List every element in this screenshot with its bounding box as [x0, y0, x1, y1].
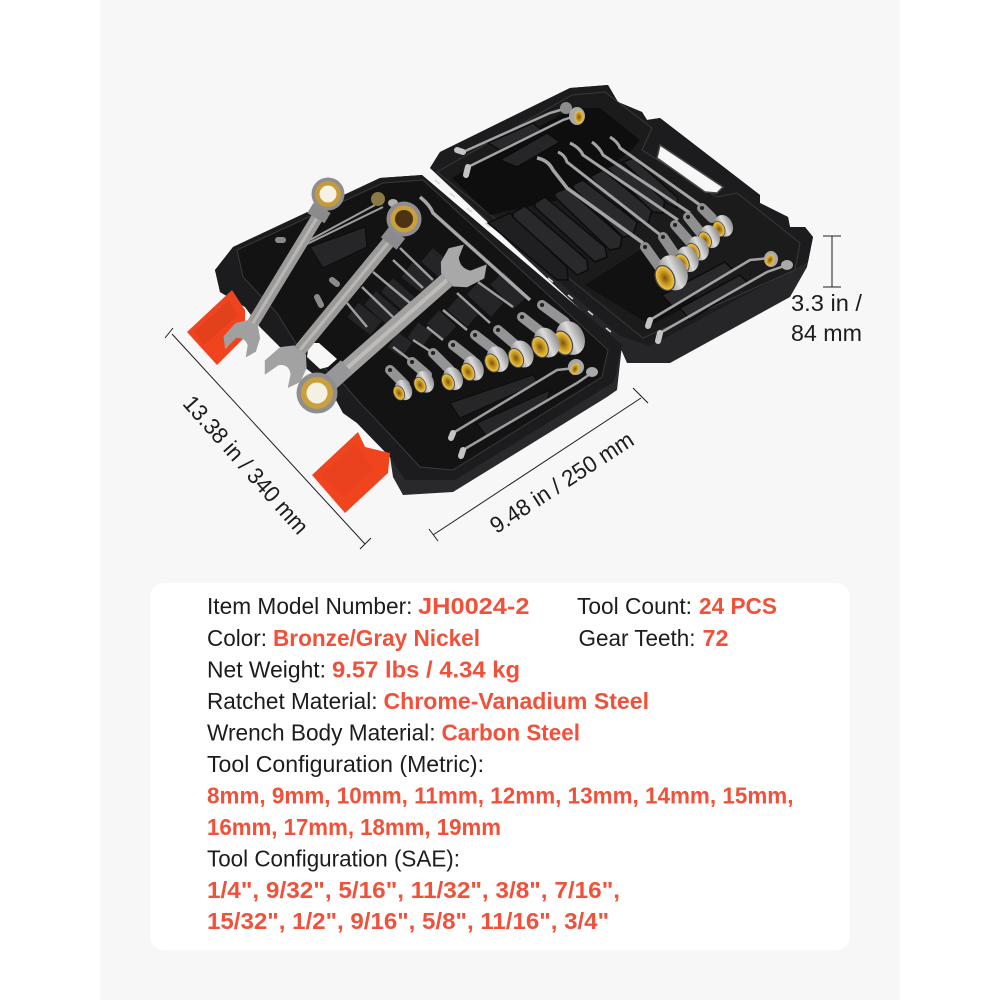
foam blocks: right half	[488, 123, 748, 320]
case: right half	[430, 85, 813, 363]
spec: color: Bronze/Gray Nickel	[273, 625, 480, 651]
spec: wrench body material: Wrench Body Material:	[207, 720, 436, 746]
spec: SAE sizes	[207, 877, 620, 934]
ratchet heads: left half	[371, 192, 598, 403]
ratchet heads: right half	[560, 102, 793, 295]
spec: tool count: Tool Count:	[577, 593, 692, 619]
spec: tool count: 24 PCS	[699, 593, 777, 619]
spec: model number: Item Model Number:	[207, 593, 412, 619]
spec: SAE sizes: 1/4", 9/32", 5/16", 11/32", 3/8", 7/16",	[207, 877, 620, 903]
latch: upper red	[187, 290, 245, 365]
latch: lower red	[312, 432, 390, 513]
background panel	[100, 0, 900, 1000]
spec: metric sizes: 8mm, 9mm, 10mm, 11mm, 12mm, 13mm, 14mm, 15mm,	[207, 782, 794, 808]
spec: color: Color:	[207, 625, 267, 651]
dimension: height	[791, 236, 863, 346]
spec: net weight	[207, 656, 520, 682]
spec: ratchet material: Ratchet Material:	[207, 688, 378, 714]
case: left half	[215, 175, 622, 495]
dimension: length	[165, 328, 371, 549]
specification card	[150, 583, 850, 950]
spec: gear teeth: Gear Teeth:	[578, 625, 696, 651]
spec: ratchet material: Chrome-Vanadium Steel	[384, 688, 649, 714]
spec: SAE heading: Tool Configuration (SAE):	[207, 846, 460, 872]
spec: metric sizes: 16mm, 17mm, 18mm, 19mm	[207, 814, 501, 840]
spec: model number	[207, 593, 530, 619]
spec: SAE sizes: 15/32", 1/2", 9/16", 5/8", 11/16", 3/4"	[207, 908, 609, 934]
wrenches: right half	[457, 108, 787, 341]
spec: wrench body material: Carbon Steel	[442, 720, 580, 746]
spec: ratchet material	[207, 688, 649, 714]
product illustration: wrench set in open case	[187, 85, 813, 513]
dimension: width: 9.48 in / 250 mm	[485, 426, 638, 538]
dimension: length: 13.38 in / 340 mm	[178, 390, 314, 539]
spec: model number: JH0024-2	[418, 593, 530, 619]
loose wrench 1	[218, 178, 344, 363]
loose wrench 2	[258, 202, 422, 395]
spec: gear teeth: 72	[702, 625, 728, 651]
spec: net weight: Net Weight:	[207, 656, 326, 682]
notch gap in case	[307, 343, 337, 369]
spec: net weight: 9.57 lbs / 4.34 kg	[332, 656, 520, 682]
spec: metric sizes	[207, 782, 794, 840]
spec: metric heading: Tool Configuration (Metric):	[207, 751, 484, 777]
spec: wrench body material	[207, 720, 580, 746]
hinge marks	[435, 180, 611, 332]
wrenches: left half	[278, 197, 593, 456]
foam blocks: left half	[353, 255, 520, 350]
foam blocks: left half large	[310, 227, 550, 437]
spec: tool count	[577, 593, 777, 619]
dimension: width	[429, 388, 648, 541]
dimension: height: 84 mm	[791, 320, 862, 346]
handle opening	[657, 145, 723, 193]
loose wrench 3	[296, 237, 493, 414]
dimension: height: 3.3 in /	[791, 290, 863, 316]
